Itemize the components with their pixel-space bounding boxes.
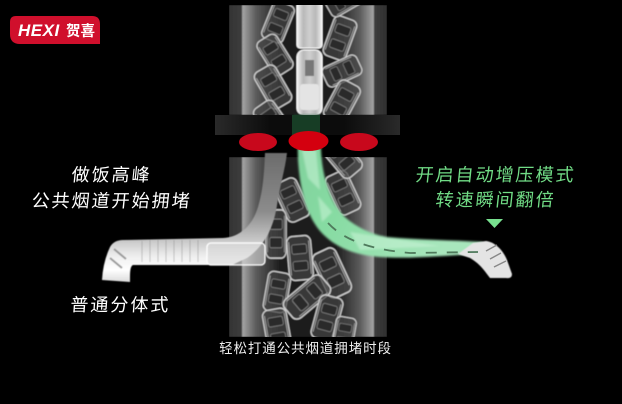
duct nozzle	[458, 241, 512, 278]
label: ordinary split type: 普通分体式	[70, 295, 171, 315]
truck in the shaft	[297, 0, 322, 115]
fan housing bar	[215, 115, 400, 135]
right heading: 转速瞬间翻倍	[435, 190, 557, 210]
logo badge	[10, 16, 100, 44]
left heading: 做饭高峰	[71, 165, 153, 185]
bottom caption: 轻松打通公共烟道拥堵时段	[219, 340, 392, 356]
red indicators	[239, 131, 378, 151]
right duct: boosted airflow in green	[293, 115, 512, 278]
logo badge: HEXI	[18, 21, 60, 40]
dashed airflow arrow line	[328, 223, 478, 253]
right heading	[415, 165, 577, 210]
chimney shaft: lower section	[229, 157, 387, 337]
left duct: ordinary split type, X-ray white	[102, 153, 287, 282]
logo badge: 贺喜	[66, 22, 95, 40]
left heading: 公共烟道开始拥堵	[31, 191, 193, 211]
left heading	[31, 165, 193, 211]
chimney shaft: upper section	[229, 5, 387, 115]
right heading: 开启自动增压模式	[415, 165, 577, 185]
icon: green down triangle	[486, 219, 503, 228]
